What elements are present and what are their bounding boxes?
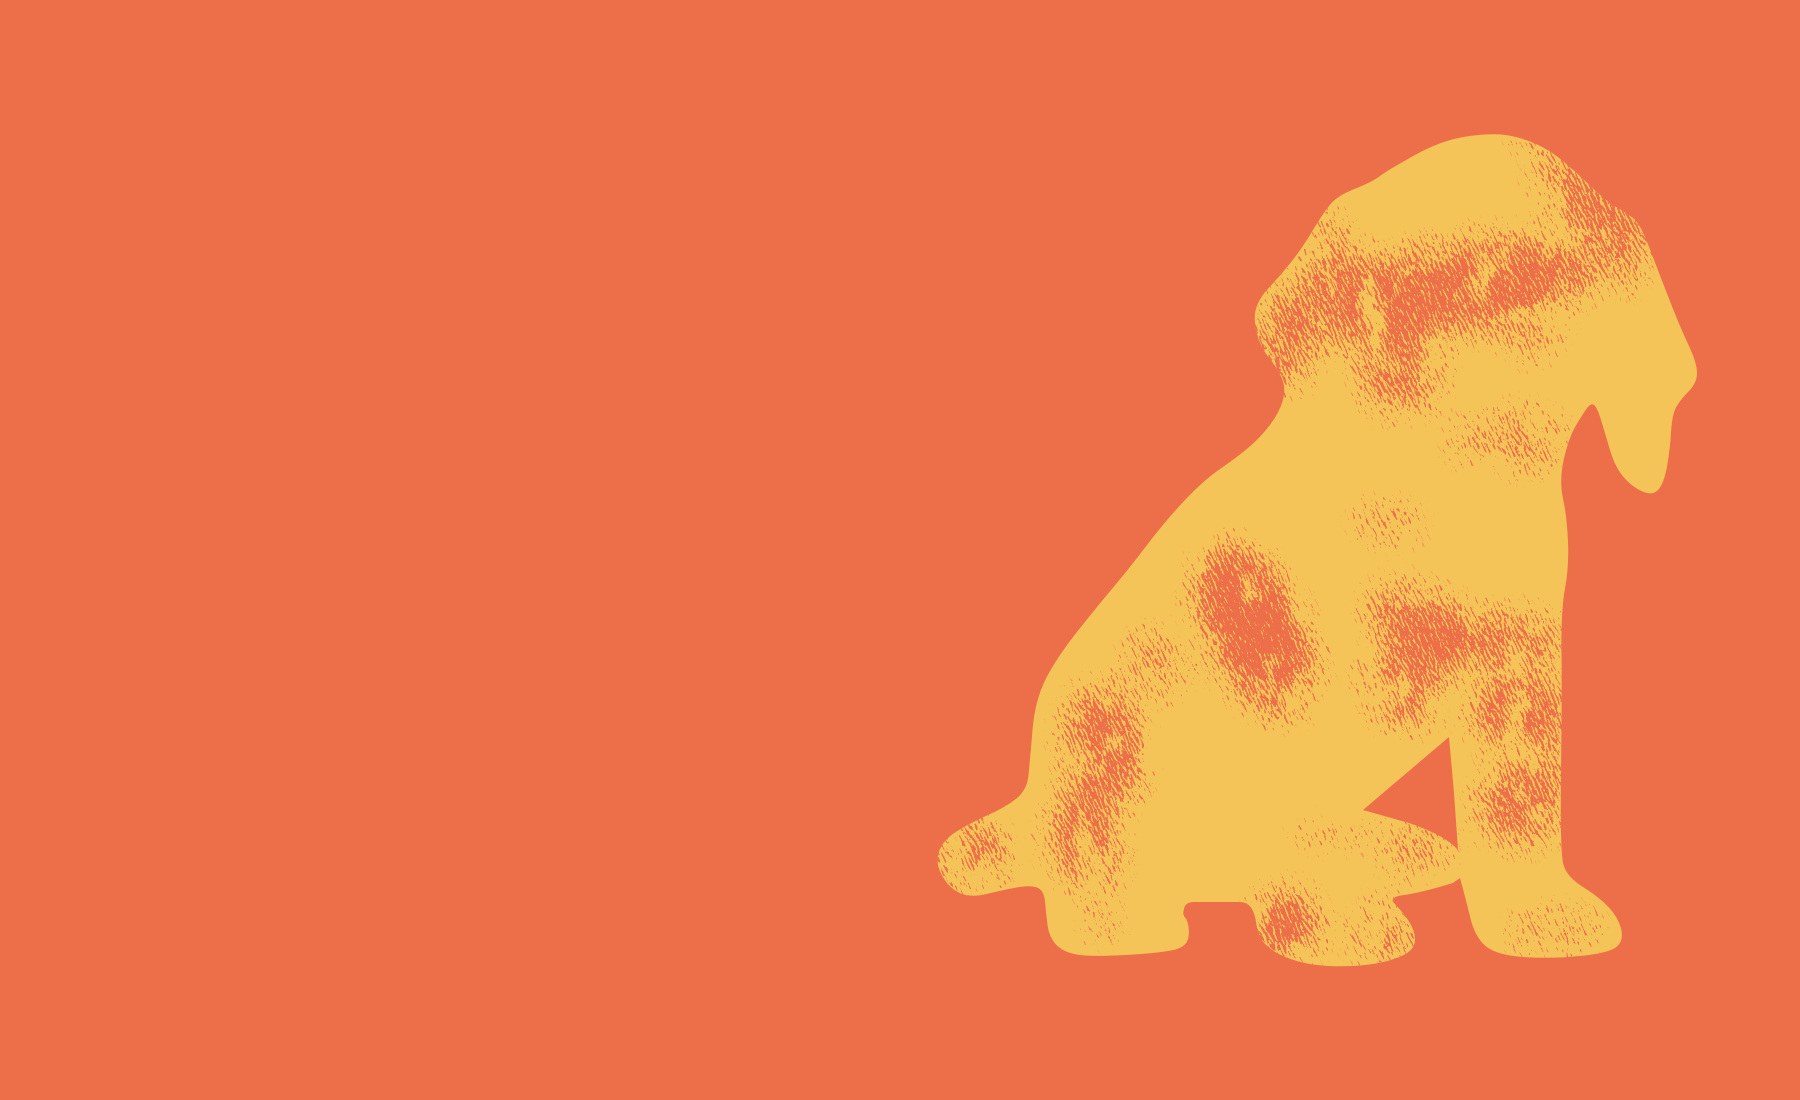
head patches — [1335, 222, 1605, 348]
illustration: textured dog silhouette on orange background — [938, 134, 1697, 966]
body patches — [1173, 526, 1337, 734]
dog body — [938, 134, 1697, 966]
distressed texture on dog — [937, 129, 1659, 969]
